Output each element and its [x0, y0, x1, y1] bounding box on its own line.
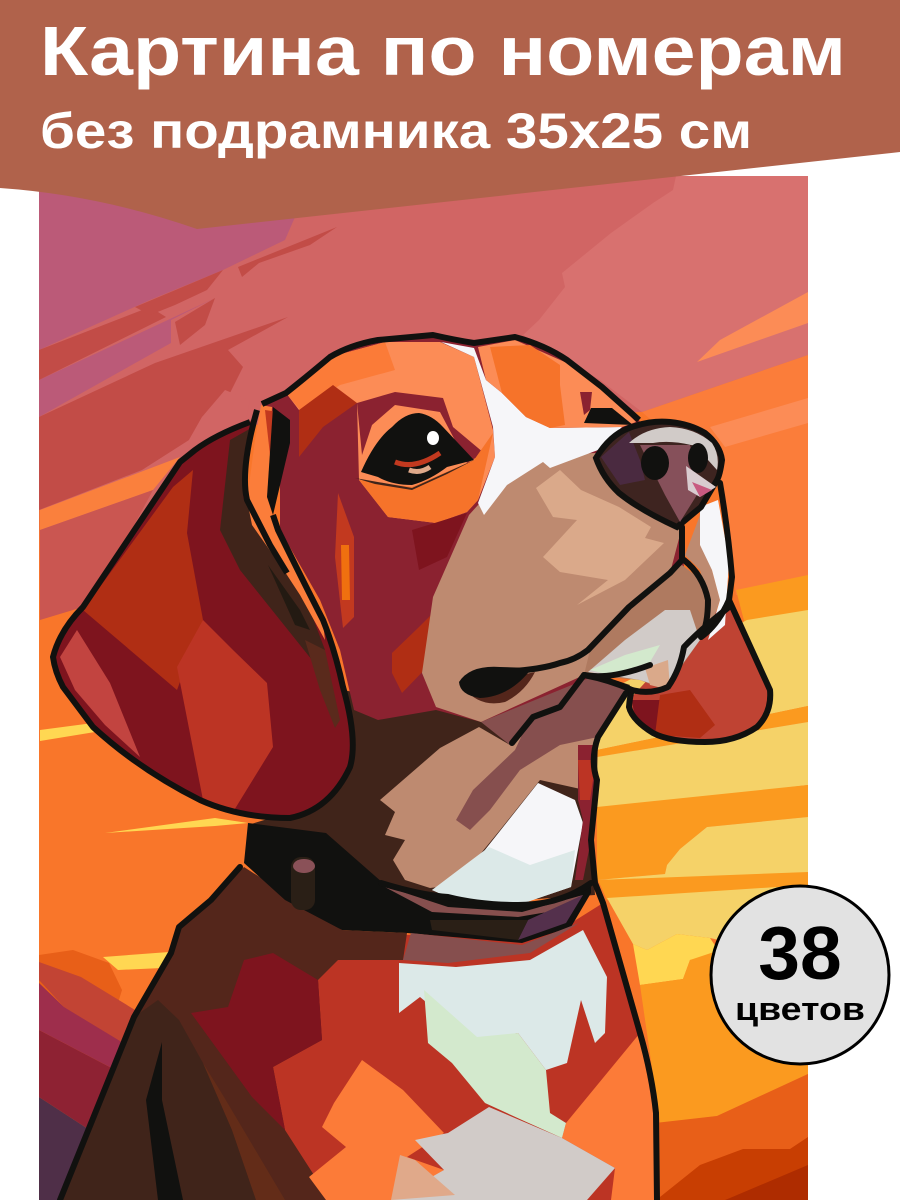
painting: beagle at sunset — [39, 176, 808, 1200]
right ear flap — [632, 610, 768, 739]
dog mouth and jaw outlines — [60, 483, 770, 1200]
title: Картина по номерам — [40, 12, 846, 90]
mouth corner — [459, 667, 535, 703]
dog eye — [355, 413, 474, 490]
badge: 38 colours: 38 — [758, 911, 842, 995]
left ear — [53, 335, 639, 818]
dog nose — [596, 422, 722, 527]
ear fold — [247, 405, 325, 640]
muzzle tan — [422, 453, 682, 722]
flap shading — [632, 700, 660, 731]
subtitle: без подрамника 35х25 см — [40, 103, 752, 159]
white blaze — [441, 342, 622, 515]
dog head — [261, 335, 729, 722]
muzzle side white — [685, 515, 720, 619]
sunset sky background — [39, 176, 808, 1200]
dog body — [60, 867, 657, 1200]
dog neck and chest fur — [248, 670, 630, 905]
banner — [0, 0, 900, 229]
jaw — [584, 565, 708, 690]
dog collar — [244, 823, 591, 963]
badge: 38 colours: цветов — [735, 991, 865, 1027]
badge: 38 colours — [711, 886, 889, 1064]
